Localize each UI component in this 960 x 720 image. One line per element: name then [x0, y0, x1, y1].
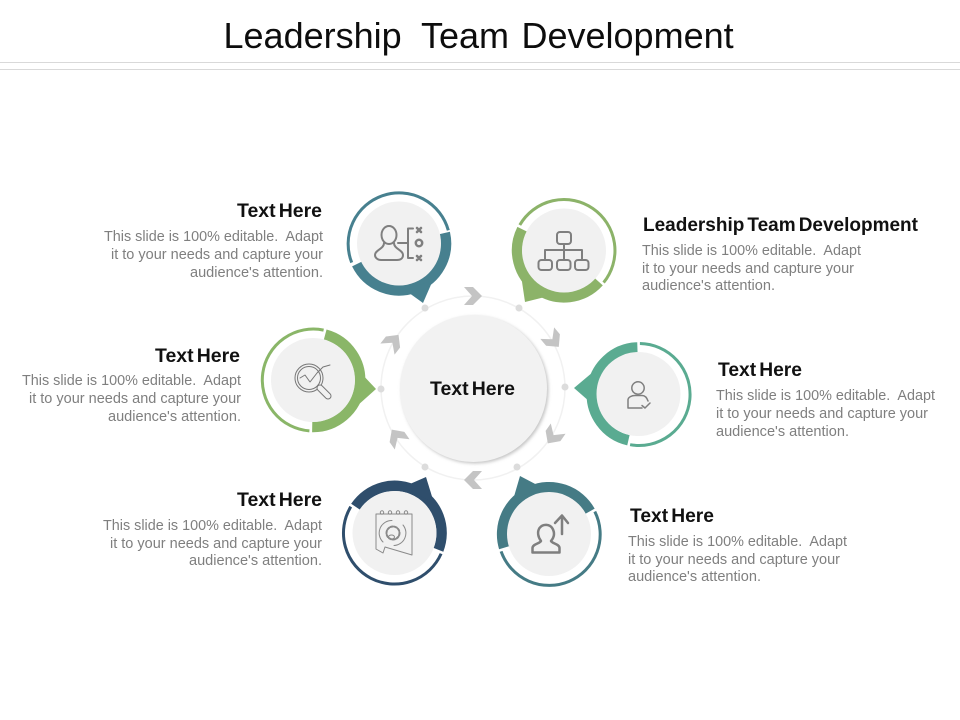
text block: bottom right: Text Here	[630, 506, 714, 527]
icon: magnifier over chart	[295, 364, 330, 396]
node: bottom right	[501, 476, 600, 585]
node: right	[574, 344, 690, 445]
text block: top right: audience's attention.	[642, 278, 775, 294]
node: top left	[348, 193, 448, 303]
text block: left: audience's attention.	[108, 409, 241, 425]
text block: top left: it to your needs and capture your	[111, 247, 323, 263]
text block: top right: This slide is 100% editable. Adapt	[642, 243, 861, 259]
text block: top left: This slide is 100% editable. Adapt	[104, 229, 323, 245]
hub label: Text Here	[430, 379, 515, 400]
text block: bottom left: This slide is 100% editable. Adapt	[103, 518, 322, 534]
text block: right	[716, 360, 935, 440]
icon: organisation chart	[538, 232, 588, 270]
title: Leadership	[224, 15, 412, 56]
text block: top right: it to your needs and capture your	[642, 261, 854, 277]
cycle arrows	[380, 287, 566, 489]
text block: right: This slide is 100% editable. Adapt	[716, 388, 935, 404]
text block: bottom left: Text Here	[237, 490, 322, 511]
text block: right: audience's attention.	[716, 424, 849, 440]
title: Team	[421, 15, 519, 56]
text block: left	[22, 346, 241, 425]
node: top right	[517, 200, 615, 302]
text block: top left: Text Here	[237, 201, 322, 222]
text block: right: it to your needs and capture your	[716, 406, 928, 422]
icon: person with up arrow	[532, 516, 568, 552]
node: bottom left	[343, 477, 442, 584]
title: Development	[522, 15, 734, 56]
text block: left: Text Here	[155, 346, 240, 367]
text block: top right: Leadership Team Development	[643, 215, 919, 236]
icon: person with strategy plan	[375, 226, 422, 260]
central hub	[378, 296, 568, 480]
text block: bottom right: it to your needs and capture your	[628, 552, 840, 568]
text block: top left	[104, 201, 323, 281]
text block: right: Text Here	[718, 360, 802, 381]
node: left	[262, 329, 376, 431]
text block: bottom right	[628, 506, 847, 585]
text block: bottom left: audience's attention.	[189, 553, 322, 569]
text block: bottom right: audience's attention.	[628, 569, 761, 585]
text block: left: This slide is 100% editable. Adapt	[22, 373, 241, 389]
text block: left: it to your needs and capture your	[29, 391, 241, 407]
text block: top right	[642, 215, 919, 294]
text block: bottom left	[103, 490, 322, 569]
text block: bottom right: This slide is 100% editable. Adapt	[628, 534, 847, 550]
icon: notebook with gear	[376, 511, 412, 555]
icon: person with check	[628, 382, 650, 408]
text block: bottom left: it to your needs and capture your	[110, 536, 322, 552]
text block: top left: audience's attention.	[190, 265, 323, 281]
